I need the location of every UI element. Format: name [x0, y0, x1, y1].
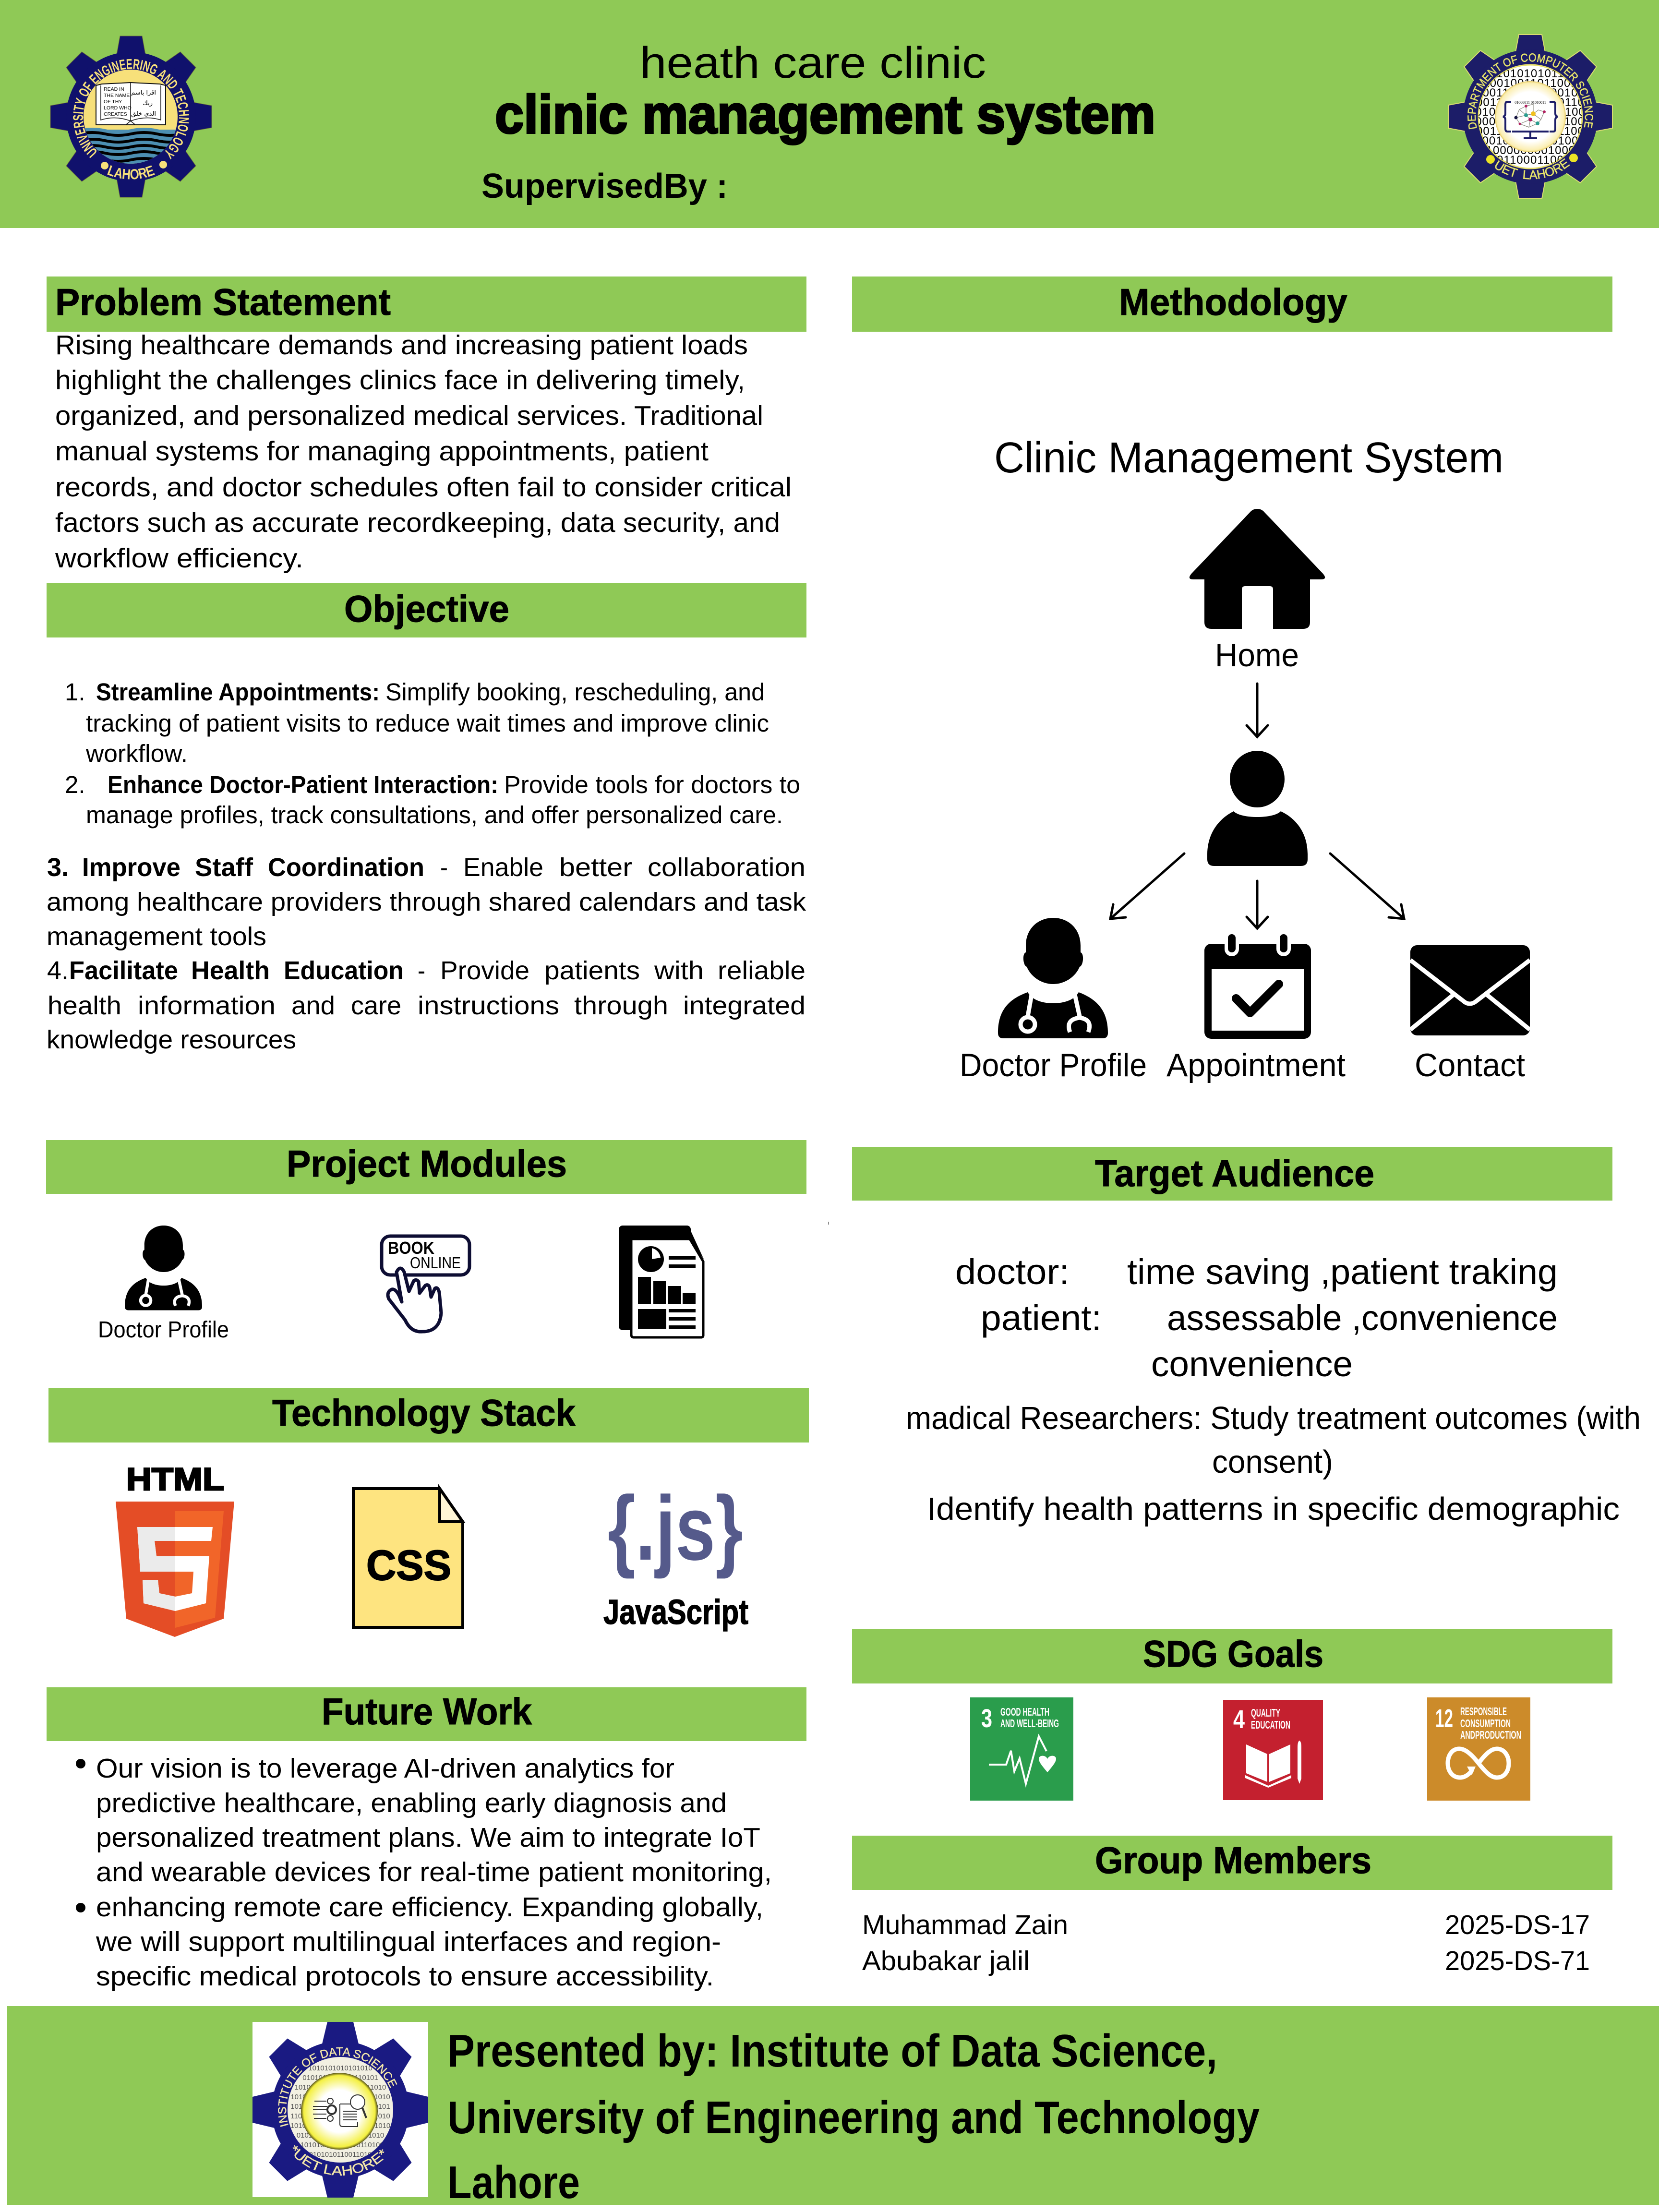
- label: doctor profile: Doctor Profile: [98, 1317, 229, 1343]
- objective items 3 and 4: with: [654, 956, 704, 985]
- heading: objective: Objective: [344, 588, 509, 630]
- footer logo: Institute of Data Science: *UET LAHORE*: [293, 2145, 384, 2176]
- objective list items 1 and 2: workflow.: [85, 740, 188, 767]
- objective list items 1 and 2: 1.: [65, 678, 85, 706]
- panel: objective: [47, 583, 806, 1054]
- bullet points: specific medical protocols to ensure accessibility.: [96, 1961, 714, 1992]
- problem statement text: records, and doctor schedules often fail to consider critical: [55, 472, 792, 503]
- icon: doctor profile: [125, 1226, 202, 1310]
- problem statement text: highlight the challenges clinics face in delivering timely,: [55, 365, 745, 396]
- objective items 3 and 4: Enable: [463, 853, 543, 882]
- icon: JavaScript: JavaScript: [603, 1593, 748, 1632]
- icon: book online: [382, 1236, 469, 1332]
- objective items 3 and 4: reliable: [718, 956, 805, 985]
- footer logo: Institute of Data Science: 0101101010101010101010: [297, 2131, 384, 2140]
- panel: problem statement: [47, 276, 806, 574]
- audience text: consent): [1212, 1444, 1333, 1480]
- footer band: [7, 2006, 1659, 2208]
- problem statement text: workflow efficiency.: [55, 543, 303, 574]
- objective items 3 and 4: Staff: [195, 853, 253, 882]
- bullet points: personalized treatment plans. We aim to integrate IoT: [96, 1822, 760, 1853]
- label: doctor profile: Doctor Profile: [960, 1047, 1147, 1083]
- logo: University of Engineering and Technology: CREATES: [104, 111, 127, 117]
- icon: report document: [619, 1226, 704, 1337]
- presented by text: Presented by: Institute of Data Science,: [447, 2025, 1217, 2077]
- bullet points: [76, 1753, 772, 1992]
- icon: JavaScript: [603, 1478, 748, 1632]
- logo: University of Engineering and Technology: OF THY: [104, 99, 122, 105]
- objective list items 1 and 2: [65, 678, 800, 829]
- objective items 3 and 4: information: [138, 991, 276, 1020]
- presented by text: [447, 2025, 1260, 2208]
- SDG card 3: GOOD HEALTH: [1000, 1706, 1049, 1718]
- label: appointment: Appointment: [1166, 1047, 1346, 1083]
- logo: Department of Computer Science: 00001100000000110010: [1462, 125, 1599, 138]
- SDG card 3: 3: [981, 1704, 992, 1733]
- audience text: doctor:: [955, 1252, 1070, 1292]
- label: home: Home: [1215, 637, 1299, 673]
- icon: CSS file: CSS: [366, 1541, 451, 1589]
- objective items 3 and 4: Facilitate: [69, 956, 178, 985]
- heading: problem statement: Problem Statement: [55, 281, 391, 323]
- problem statement text: organized, and personalized medical services. Traditional: [55, 400, 763, 431]
- objective items 3 and 4: Education: [284, 956, 404, 985]
- objective list items 1 and 2: 2.: [65, 771, 85, 798]
- objective items 3 and 4: integrated: [683, 991, 805, 1020]
- SDG card 4: QUALITY: [1251, 1707, 1280, 1719]
- icon: user: [1207, 751, 1308, 866]
- member names and IDs: 2025-DS-17: [1445, 1910, 1590, 1940]
- objective items 3 and 4: knowledge resources: [47, 1025, 296, 1054]
- panel: technology stack: [48, 1388, 809, 1637]
- icon: HTML5 shield: HTML: [126, 1461, 224, 1497]
- supervised by: SupervisedBy :: [481, 167, 728, 205]
- logo: University of Engineering and Technology: LORD WHO: [104, 105, 132, 111]
- panel: future work: [47, 1687, 806, 1992]
- heading: target audience: Target Audience: [1095, 1152, 1374, 1194]
- footer logo: Institute of Data Science: 101010101100110101: [305, 2151, 376, 2159]
- title: heath care clinic: heath care clinic: [640, 38, 986, 87]
- SDG card 4: EDUCATION: [1251, 1719, 1290, 1731]
- SDG card 4: [1223, 1700, 1323, 1800]
- footer logo: Institute of Data Science: 10101010101010101011010: [295, 2083, 386, 2092]
- objective items 3 and 4: Provide: [440, 956, 529, 985]
- logo: University of Engineering and Technology: الذي خلق: [131, 110, 156, 118]
- objective items 3 and 4: among healthcare providers through shared calendars and task: [47, 888, 806, 916]
- presented by text: University of Engineering and Technology: [447, 2092, 1260, 2143]
- member names and IDs: Abubakar jalil: [862, 1946, 1030, 1976]
- footer logo: Institute of Data Science: 1101010100101010110100: [297, 2141, 384, 2149]
- footer logo: Institute of Data Science: 1010010101010101010110101: [290, 2103, 390, 2111]
- SDG card 3: AND WELL-BEING: [1000, 1717, 1059, 1730]
- header band: [0, 0, 1659, 228]
- logo: University of Engineering and Technology: [50, 36, 212, 198]
- objective list items 1 and 2: tracking of patient visits to reduce wait times and improve clinic: [86, 709, 769, 737]
- logo: Department of Computer Science: 01000110000000010001: [1462, 86, 1599, 99]
- objective list items 1 and 2: Streamline Appointments:: [96, 678, 380, 706]
- objective items 3 and 4: Improve: [82, 853, 180, 882]
- heading: group members: Group Members: [1095, 1839, 1371, 1881]
- objective list items 1 and 2: manage profiles, track consultations, and offer personalized care.: [86, 801, 783, 829]
- bullet points: and wearable devices for real-time patient monitoring,: [96, 1857, 772, 1887]
- logo: Department of Computer Science: 10001100000000011010: [1462, 96, 1599, 109]
- member names and IDs: 2025-DS-71: [1445, 1946, 1590, 1976]
- logo: Department of Computer Science: DEPARTMENT OF COMPUTER SCIENCE: [1467, 53, 1594, 130]
- logo: University of Engineering and Technology: اقرا باسم: [131, 89, 156, 96]
- footer logo: Institute of Data Science: 1010101010101010: [308, 2064, 373, 2072]
- diagram title: Clinic Management System: [994, 434, 1503, 482]
- icon: book online: BOOK: [388, 1238, 434, 1258]
- objective items 3 and 4: -: [440, 853, 448, 882]
- audience text: [906, 1252, 1641, 1527]
- panel: project modules: [46, 1140, 806, 1343]
- objective items 3 and 4: better: [559, 853, 632, 882]
- problem statement text: [55, 330, 792, 574]
- icon: doctor: [998, 918, 1108, 1038]
- footer logo: Institute of Data Science: 1100101010101010101001010: [290, 2112, 390, 2120]
- member names and IDs: Muhammad Zain: [862, 1910, 1068, 1940]
- objective items 3 and 4: Coordination: [268, 853, 424, 882]
- SDG card 12: RESPONSIBLE: [1460, 1705, 1507, 1718]
- heading: future work: Future Work: [322, 1690, 532, 1732]
- objective items 3 and 4: 4.: [47, 956, 69, 985]
- audience text: assessable ,convenience: [1167, 1298, 1558, 1338]
- objective items 3 and 4: [47, 853, 806, 1054]
- SDG card 12: 12: [1435, 1704, 1453, 1733]
- arrow: to appointment: [1247, 881, 1268, 928]
- SDG card 12: ANDPRODUCTION: [1460, 1729, 1521, 1741]
- icon: envelope: [1410, 945, 1530, 1035]
- SDG card 3: [970, 1697, 1073, 1801]
- logo: Department of Computer Science: 10100100000000100100: [1462, 134, 1599, 147]
- audience text: convenience: [1151, 1344, 1353, 1384]
- icon: JavaScript: {.js}: [608, 1478, 743, 1579]
- bullet points: enhancing remote care efficiency. Expanding globally,: [96, 1892, 763, 1923]
- footer logo: Institute of Data Science: 0101010101010110101: [302, 2074, 378, 2082]
- bullet points: we will support multilingual interfaces and region-: [96, 1926, 721, 1957]
- icon: book online: ONLINE: [410, 1254, 461, 1272]
- objective items 3 and 4: 3.: [47, 853, 69, 882]
- objective items 3 and 4: through: [574, 991, 668, 1020]
- heading: SDG goals: SDG Goals: [1143, 1633, 1323, 1675]
- stray mark: i: [828, 1220, 829, 1226]
- panel: group members: [852, 1836, 1612, 1976]
- objective items 3 and 4: patients: [544, 956, 640, 985]
- bullet points: Our vision is to leverage AI-driven analytics for: [96, 1753, 674, 1784]
- footer logo: Institute of Data Science: INSTITUTE OF DATA SCIENCE: [278, 2047, 397, 2127]
- audience text: Identify health patterns in specific demographic: [927, 1491, 1620, 1527]
- objective items 3 and 4: instructions: [418, 991, 559, 1020]
- logo: Department of Computer Science: 01010100000000010010: [1462, 106, 1599, 119]
- logo: University of Engineering and Technology: UNIVERSITY OF ENGINEERING AND TECHNOLOGY: [73, 59, 189, 159]
- footer logo: Institute of Data Science: 1010010101010101010101010: [290, 2122, 390, 2130]
- objective items 3 and 4: Health: [191, 956, 270, 985]
- objective list items 1 and 2: Provide tools for doctors to: [504, 771, 800, 798]
- title: clinic management system: clinic management system: [495, 84, 1155, 144]
- problem statement text: factors such as accurate recordkeeping, data security, and: [55, 507, 780, 538]
- logo: Department of Computer Science: 010101010110: [1490, 67, 1571, 80]
- heading: project modules: Project Modules: [287, 1142, 567, 1185]
- heading: methodology: Methodology: [1119, 281, 1347, 323]
- SDG card 12: [1427, 1697, 1530, 1801]
- bullet points: predictive healthcare, enabling early diagnosis and: [96, 1788, 727, 1818]
- logo: University of Engineering and Technology: LAHORE: [108, 165, 155, 180]
- heading: technology stack: Technology Stack: [272, 1392, 576, 1434]
- icon: CSS file: [353, 1489, 463, 1627]
- logo: University of Engineering and Technology: READ IN: [104, 86, 124, 92]
- footer logo: Institute of Data Science: [252, 2022, 428, 2198]
- problem statement text: manual systems for managing appointments, patient: [55, 436, 709, 467]
- arrow: to doctor profile: [1110, 854, 1184, 919]
- audience text: patient:: [981, 1298, 1102, 1338]
- label: contact: Contact: [1415, 1047, 1525, 1083]
- audience text: time saving ,patient traking: [1127, 1252, 1558, 1292]
- icon: HTML5 shield: [116, 1461, 234, 1637]
- panel: methodology: [852, 276, 1612, 1083]
- arrow: to contact: [1330, 854, 1404, 919]
- objective items 3 and 4: care: [351, 991, 401, 1020]
- member names and IDs: [862, 1910, 1590, 1976]
- logo: Department of Computer Science: UET LAHORE: [1495, 158, 1570, 180]
- panel: SDG goals: [852, 1629, 1612, 1801]
- logo: Department of Computer Science: 001001001101100100: [1469, 77, 1591, 90]
- audience text: madical Researchers: Study treatment outcomes (with: [906, 1400, 1641, 1436]
- icon: home: [1190, 509, 1325, 629]
- logo: University of Engineering and Technology: THE NAME: [104, 93, 130, 98]
- arrow: home to user: [1247, 684, 1268, 737]
- icon: calendar: [1204, 931, 1311, 1039]
- logo: Department of Computer Science: 11000110000000010001: [1462, 115, 1599, 128]
- objective items 3 and 4: -: [418, 956, 425, 985]
- logo: Department of Computer Science: 01000011 01010011: [1515, 100, 1546, 105]
- logo: Department of Computer Science: 1001000000001000110: [1466, 144, 1595, 157]
- presented by text: Lahore: [447, 2157, 580, 2208]
- objective items 3 and 4: health: [48, 991, 121, 1020]
- diagram: clinic management system flow: [960, 434, 1530, 1083]
- SDG card 12: CONSUMPTION: [1460, 1717, 1511, 1730]
- logo: University of Engineering and Technology: ربك: [143, 100, 153, 107]
- objective list items 1 and 2: Enhance Doctor-Patient Interaction:: [108, 771, 498, 798]
- logo: Department of Computer Science: 0000110001100100: [1476, 154, 1585, 167]
- problem statement text: Rising healthcare demands and increasing patient loads: [55, 330, 748, 361]
- logo: Department of Computer Science: [1448, 34, 1613, 199]
- objective list items 1 and 2: Simplify booking, rescheduling, and: [385, 678, 765, 706]
- objective items 3 and 4: collaboration: [648, 853, 805, 882]
- footer logo: Institute of Data Science: 1010110101010101010101010: [290, 2093, 390, 2101]
- objective items 3 and 4: and: [291, 991, 335, 1020]
- objective items 3 and 4: management tools: [47, 922, 266, 951]
- panel: target audience: [852, 1147, 1641, 1527]
- SDG card 4: 4: [1233, 1705, 1245, 1734]
